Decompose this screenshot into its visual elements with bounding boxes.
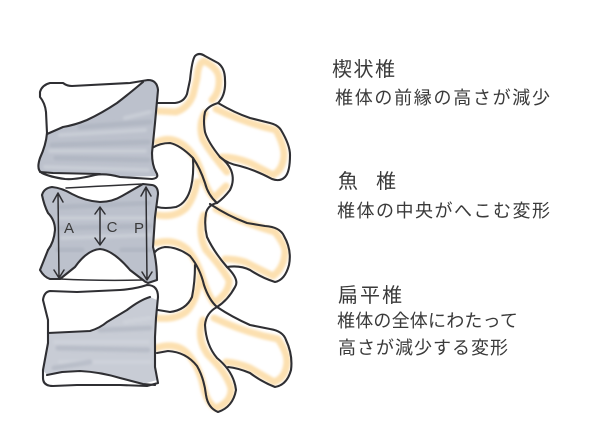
label: A: A (64, 220, 74, 237)
text block: fish vertebra (337, 170, 552, 221)
text block: wedge vertebra (332, 58, 552, 108)
description line 1: flat vertebra: 椎体の全体にわたって (337, 311, 518, 331)
heading: fish vertebra: 魚椎 (338, 170, 414, 193)
vertebral body: flat vertebra (43, 285, 158, 386)
heading: wedge vertebra: 楔状椎 (332, 58, 396, 81)
arrow: A height (53, 193, 64, 278)
diagram: lumbar spine side view (38, 54, 291, 412)
arrow: P height (141, 187, 152, 280)
label: P: P (134, 220, 144, 237)
vertebral body: wedge vertebra (38, 80, 158, 179)
vertebral body: fish vertebra with arrows (40, 184, 158, 283)
heading: flat vertebra: 扁平椎 (338, 284, 404, 307)
text block: flat vertebra (337, 284, 518, 358)
posterior elements: middle vertebra (155, 203, 290, 318)
description: wedge vertebra: 椎体の前縁の高さが減少 (335, 88, 552, 108)
description: fish vertebra: 椎体の中央がへこむ変形 (337, 201, 552, 221)
description line 2: flat vertebra: 高さが減少する変形 (338, 338, 509, 358)
label: C: C (107, 219, 118, 236)
arrow: C height (95, 207, 105, 245)
posterior elements: upper vertebra (152, 54, 290, 216)
posterior elements: lower vertebra (156, 307, 291, 412)
